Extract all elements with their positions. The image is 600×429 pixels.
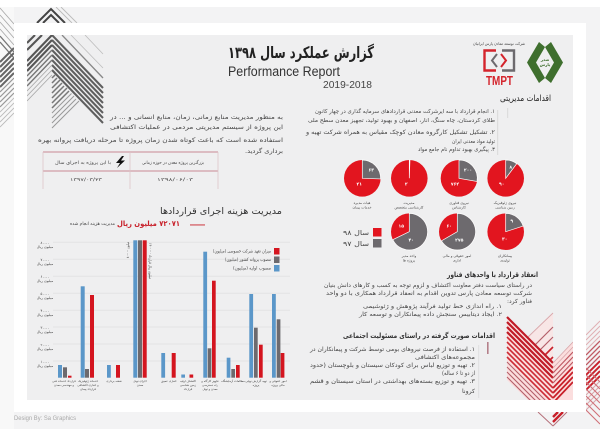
- category labels: اجرای تونل: [133, 379, 147, 383]
- y axis labels: میلیون ریال: [37, 245, 53, 249]
- decoration: red chevrons bottom: [538, 412, 567, 426]
- category labels: معدن: [137, 383, 144, 387]
- decoration: red chevrons in panel: [506, 312, 573, 400]
- pie captions: هیات مدیره: [354, 201, 371, 205]
- pie captions: زمین شناسی: [495, 206, 515, 210]
- table: contract summary: [43, 152, 218, 189]
- table: contract summary: بزرگترین پروژه معدن در حوزه زمانی: [142, 159, 204, 166]
- chart legend: مصوب پروانه کشور (میلیون): [225, 257, 271, 263]
- text: social responsibility: مجموعه‌های اکتشافی: [415, 354, 475, 361]
- title: 2019-2018: [323, 79, 372, 91]
- bar chart: [37, 240, 290, 391]
- chart legend: مصوب اولیه (میلیون): [233, 266, 271, 272]
- category labels: اکتشاف اولیه: [180, 379, 196, 383]
- bar chart: ۱۴۰۰۰۰۰ میلیون ریال قرارداد: [148, 243, 153, 279]
- y axis labels: ۳۰۰۰۰: [40, 326, 50, 330]
- bars: blue: [58, 240, 276, 378]
- chart legend: [213, 248, 280, 272]
- category labels: زمین شناسی: [180, 383, 197, 387]
- management actions list: [305, 108, 508, 155]
- intro paragraph: برداری گردید.: [245, 147, 283, 155]
- pie captions: اداری: [453, 258, 461, 262]
- text: technology units: شرکت توسعه معادن پارس تدوین اقدام به انعقاد قرارداد همکاری با دو واحد: [326, 290, 532, 297]
- contract cost figure: [70, 219, 205, 228]
- pie 2: [391, 160, 428, 197]
- bars: red: [68, 240, 284, 378]
- pie 4: ۹۰: [499, 182, 504, 187]
- y axis labels: میلیون ریال: [37, 262, 53, 266]
- category labels: قرارداد پیمان: [80, 387, 97, 391]
- heading: contract cost management: مدیریت هزینه اجرای قراردادها: [160, 206, 282, 217]
- category labels: مالی پروژه: [271, 383, 285, 387]
- pie 7: [487, 213, 524, 250]
- y axis labels: میلیون ریال: [37, 347, 53, 351]
- text: social responsibility: ۳. تهیه و توزیع بسته‌های بهداشتی در استان سیستان و قشم: [310, 379, 475, 385]
- management actions list: تولید مواد معدنی ایران: [452, 139, 495, 145]
- text: social responsibility: کرونا: [462, 388, 475, 395]
- heading: contracts with technology units: انعقاد قرارداد با واحدهای فناور: [446, 270, 538, 279]
- intro paragraph: استفاده شده است که باعث کوتاه شدن زمان پروژه تا مرحله دریافت پروانه بهره: [38, 137, 283, 144]
- pie 5: [391, 213, 428, 250]
- logos: [473, 41, 563, 88]
- pie captions: مدیریت: [403, 201, 415, 205]
- decoration: grey chevrons outside frame: [0, 8, 14, 127]
- category labels: تجهیز کارگاه و: [200, 379, 219, 383]
- management actions list: طلای کردستان، چاه سنگ، انار، اصفهان و بهبود تولید، تجهیز معدن سطح ملی: [308, 117, 495, 124]
- pie captions: [352, 201, 516, 262]
- category labels: [52, 379, 287, 391]
- pie 1: ۶۳: [369, 167, 374, 173]
- logo: green diamond: پارس: [540, 62, 551, 67]
- y axis labels: میلیون ریال: [37, 330, 53, 334]
- pie 3: [441, 160, 477, 197]
- category labels: نقشه برداری: [106, 379, 122, 383]
- pie 7: ۹: [510, 220, 513, 225]
- contract cost figure: ۷۲۰۷۱ میلیون ریال: [117, 219, 180, 228]
- y axis labels: میلیون ریال: [37, 296, 53, 300]
- rotated value labels: ۸۰۰۰۰۰ میلیون: [125, 242, 130, 258]
- y axis labels: ۴۰۰۰۰: [40, 309, 50, 313]
- pie charts: [344, 160, 524, 250]
- heading: social responsibility: اقدامات صورت گرفته در راستای مسئولیت اجتماعی: [343, 331, 495, 340]
- pie 6: ۲۷۵: [455, 238, 464, 244]
- y axis labels: ۶۰۰۰۰: [40, 275, 50, 279]
- pie captions: خدمات پیمان: [352, 206, 372, 210]
- logo: green diamond: [527, 42, 563, 83]
- y axis labels: ۱۰۰۰۰: [40, 360, 50, 364]
- contract cost figure: مدیریت هزینه انجام شده: [70, 221, 115, 227]
- y axis labels: ۲۰۰۰۰: [40, 343, 50, 347]
- y axis labels: ۷۰۰۰۰: [40, 258, 50, 262]
- pie 4: [487, 160, 524, 197]
- category labels: حفاری عمیق: [161, 379, 177, 383]
- logos caption: شرکت توسعه معادن پارس ایرانیان: [473, 41, 525, 46]
- text: technology units: ۲. ایجاد دیتابیس سنجش داده پیمانکاران و توسعه کار: [358, 311, 502, 318]
- management actions list: ۲. تشکیل تشکیل کارگروه معادن کوچک مقیاس به همراه شرکت تهیه و: [305, 128, 495, 136]
- text: technology units: [324, 282, 533, 318]
- category labels: و مهندسی معدن: [54, 383, 75, 387]
- category labels: خدمات ژئوفیزیک: [78, 379, 98, 383]
- bars: grey: [63, 240, 280, 378]
- pie 3: ۷۶۲: [451, 181, 459, 187]
- pie 4: ۸: [509, 165, 512, 170]
- pie legend: [343, 228, 382, 248]
- category labels: معدن و تونل: [202, 387, 218, 391]
- text: technology units: در راستای سیاست دفتر معاونت اکتشاف و لزوم توجه به کسب و کارهای دانش بنیان: [324, 282, 533, 289]
- category labels: قرارداد خدمات فنی: [52, 379, 76, 383]
- pie 3: ۲۰۰: [464, 167, 472, 173]
- y axis labels: ۸۰۰۰۰: [40, 241, 50, 245]
- category labels: امور حقوقی و: [268, 379, 287, 383]
- footer credit: Design By: Sa Graphics: [14, 415, 77, 422]
- table: contract summary: ۱۳۹۸/۰۶/۰۳: [157, 177, 194, 183]
- category labels: تهیه گزارش نهایی: [245, 379, 267, 383]
- category labels: قرارداد: [184, 387, 193, 391]
- category labels: و حفاری اکتشافی: [77, 383, 99, 387]
- pie captions: کارشناس: [452, 206, 466, 210]
- table: contract summary: با این پروژه به اجرای سال: [55, 160, 111, 166]
- title: گزارش عملکرد سال ۱۳۹۸: [228, 43, 374, 62]
- intro paragraph: این پروژه از سیستم مدیریتی مردمی در عملیات اکتشافی: [110, 124, 283, 131]
- y axis labels: [37, 241, 53, 368]
- pie captions: نیروی فناوری: [449, 201, 469, 205]
- text: technology units: فناور کرد:: [507, 298, 532, 305]
- intro paragraph: [38, 114, 283, 155]
- text: social responsibility: [309, 342, 489, 398]
- pie captions: تولیدی: [500, 258, 510, 262]
- pie 2: ۲: [405, 181, 408, 187]
- chart legend: میزان تعهد شرکت خصوصی (میلیون): [213, 248, 271, 254]
- text: technology units: ۱. راه اندازی خط تولید فرآیند پژوهش و ژئوشیمی: [363, 303, 502, 310]
- title: [228, 43, 374, 91]
- decoration: red chevrons outside frame: [586, 321, 600, 424]
- management actions list: ۱. انجام قرارداد با سه ایرشرکت معدنی قراردادهای سرمایه گذاری در چهار کانون: [315, 108, 495, 115]
- text: social responsibility: ۲. تهیه و توزیع لباس برای کودکان سیستان و بلوچستان (حدود: [310, 362, 475, 369]
- y axis labels: میلیون ریال: [37, 279, 53, 283]
- pie legend: سال ۹۷: [343, 240, 369, 248]
- panel: main sheet: [27, 35, 573, 400]
- pie captions: پروژه ها: [403, 258, 415, 262]
- pie captions: امور حقوقی و مالی: [443, 254, 471, 258]
- decoration: small grey chevron on top: [37, 7, 77, 23]
- table: contract summary: ۱۳۹۷/۰۳/۲۳: [70, 177, 103, 183]
- heading: management actions: اقدامات مدیریتی: [500, 94, 551, 104]
- pie 1: ۲۱: [357, 181, 362, 187]
- pie captions: واحد مدیر: [401, 254, 416, 258]
- title: Performance Report: [228, 64, 340, 79]
- text: social responsibility: ۱. استفاده از فرصت نیروهای بومی توسط شرکت و پیمانکاران در: [309, 346, 475, 353]
- category labels: راه دسترسی: [202, 383, 218, 387]
- pie 5: ۴۰: [409, 239, 414, 244]
- logo: TMPT: TMPT: [486, 74, 513, 88]
- text: social responsibility: از دو تا ۶ ساله): [442, 371, 475, 377]
- pie captions: کارشناسی متخصص: [395, 206, 424, 210]
- y axis labels: میلیون ریال: [37, 364, 53, 368]
- pie captions: نیروی ژئوفیزیک: [494, 201, 516, 205]
- y axis labels: ۵۰۰۰۰: [40, 292, 50, 296]
- pie legend: سال ۹۸: [343, 229, 369, 237]
- logo: green diamond: صدر: [540, 57, 549, 62]
- pie 5: ۱۵: [399, 225, 404, 230]
- decoration: grey chevrons in panel: [27, 35, 103, 128]
- management actions list: ۳. پیگیری بهبود تداوم نام جامع مواد: [418, 146, 495, 153]
- intro paragraph: به منظور مدیریت منابع زمانی، زمان، منابع انسانی و ... در: [109, 114, 283, 121]
- icon: lightning bolt: [116, 156, 125, 168]
- pie 7: ۳۰: [502, 237, 507, 243]
- category labels: مطالعات آزمایشگاه: [221, 379, 245, 383]
- pie captions: پیمانکاران: [498, 254, 512, 258]
- y axis labels: میلیون ریال: [37, 313, 53, 317]
- pie 6: [439, 213, 476, 250]
- pie 6: ۶۰: [447, 225, 452, 230]
- category labels: پروژه: [253, 383, 260, 387]
- pie 1: [344, 160, 381, 197]
